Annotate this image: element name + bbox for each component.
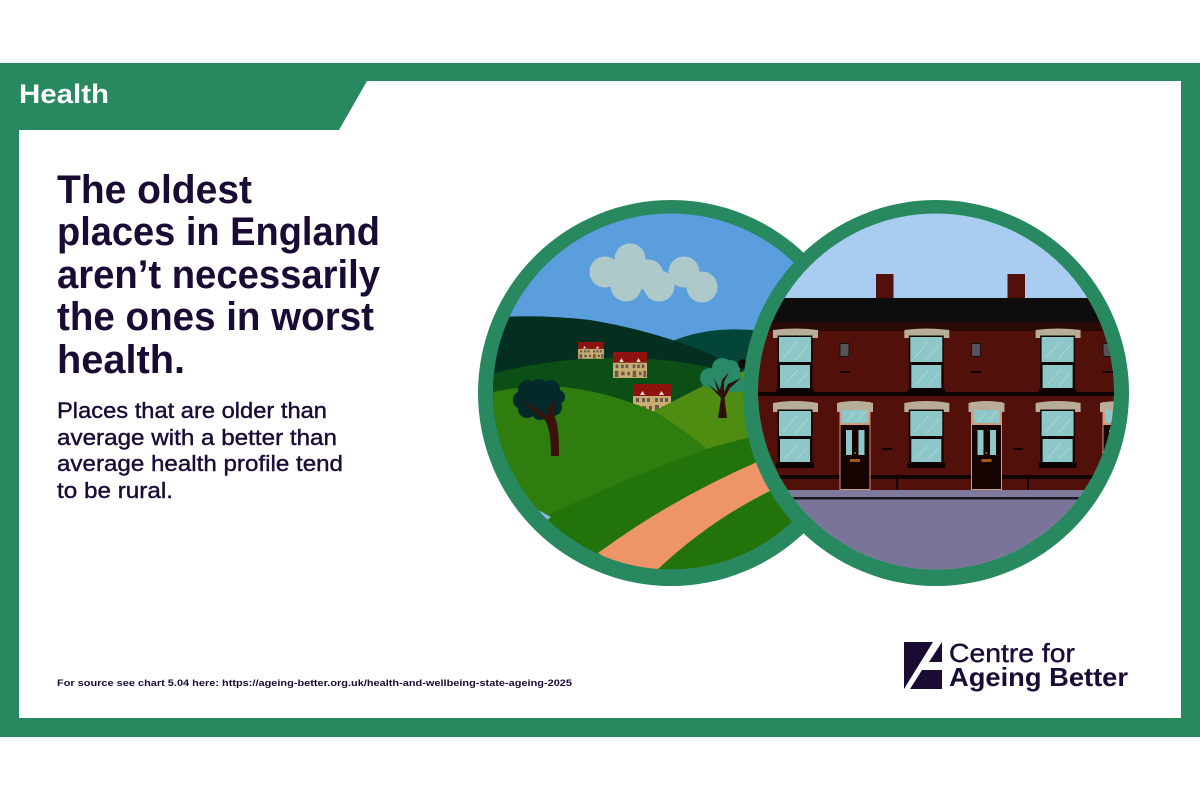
blue gap (538, 510, 551, 520)
brick wall (750, 331, 1130, 490)
air bricks (840, 371, 1113, 450)
windows upper (776, 336, 814, 394)
logo: Centre for (949, 638, 1075, 668)
mid hill (493, 358, 712, 470)
title: aren’t necessarily (57, 253, 381, 297)
lintels (773, 328, 1081, 412)
section tab (0, 79, 367, 130)
title: places in England (57, 210, 380, 254)
illustration: rural landscape circle (478, 200, 804, 586)
road (794, 500, 1078, 570)
title: The oldest (57, 168, 252, 212)
windows lower (776, 410, 814, 468)
title (57, 168, 381, 382)
roof (772, 298, 1100, 322)
foreground green hill (480, 386, 708, 530)
section tab: Health (19, 79, 109, 109)
body text (57, 398, 343, 503)
dark foreground (547, 438, 792, 570)
plinth band (778, 475, 1094, 490)
pavement (788, 490, 1084, 498)
tree: dark (513, 379, 565, 456)
body text: average with a better than (57, 425, 337, 450)
storey band (750, 392, 1130, 396)
tree: teal (700, 358, 745, 418)
title: health. (57, 338, 185, 382)
dark hill (493, 316, 744, 420)
back hill (674, 329, 754, 371)
vents (840, 344, 1112, 356)
illustration: terraced houses circle (743, 200, 1136, 586)
small black bush (738, 359, 746, 369)
body text: to be rural. (57, 478, 173, 503)
path (598, 462, 772, 570)
logo (904, 638, 1128, 692)
cloud (590, 244, 718, 302)
light green hill (653, 370, 748, 449)
title: the ones in worst (57, 295, 374, 339)
source note: For source see chart 5.04 here: https://ageing-better.org.uk/health-and-wellbeing-state-ageing-2025 (57, 678, 573, 689)
village houses (578, 342, 604, 359)
chimneys (876, 274, 894, 299)
body text: average health profile tend (57, 451, 343, 476)
logo: Ageing Better (949, 662, 1128, 692)
body text: Places that are older than (57, 398, 327, 423)
doors (837, 401, 873, 491)
